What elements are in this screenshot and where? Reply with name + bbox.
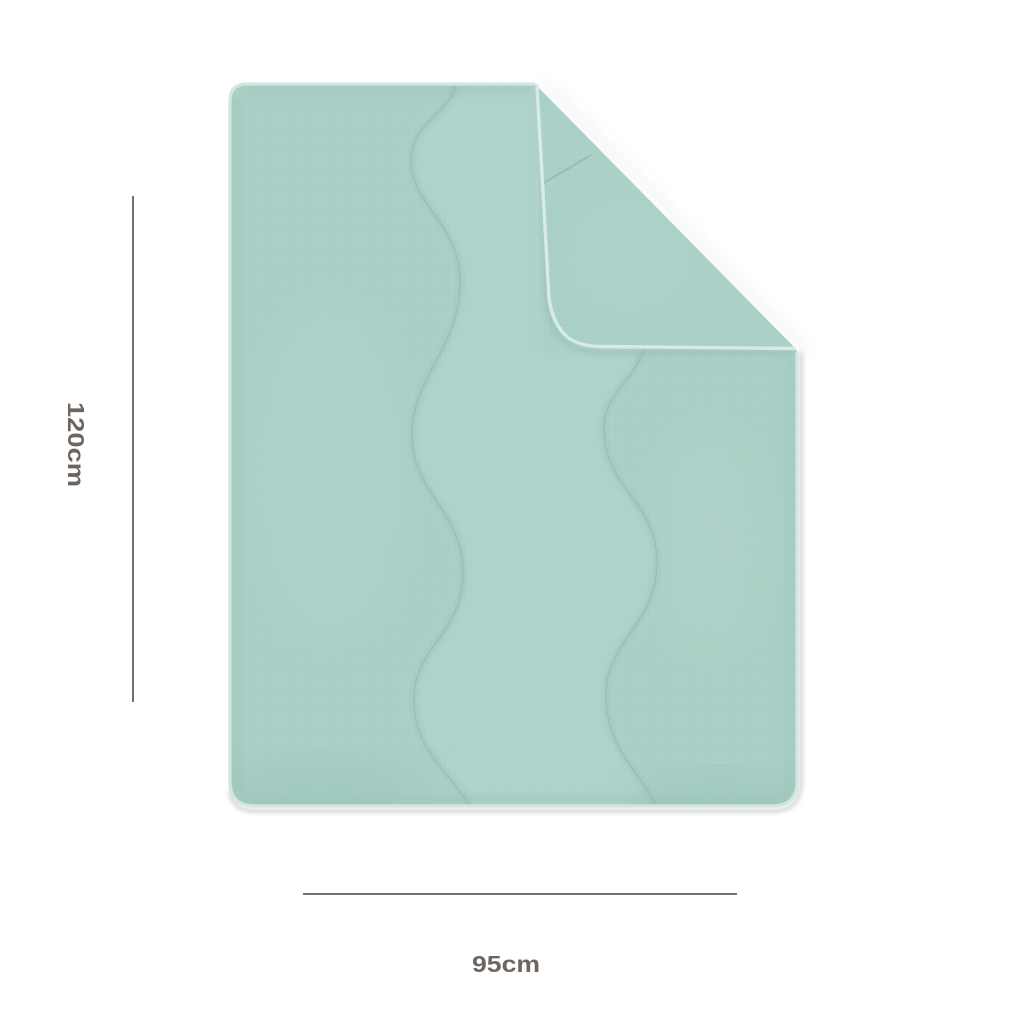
folded corner xyxy=(530,80,800,352)
blanket body xyxy=(210,80,810,822)
quilting seam: right wave shadow xyxy=(604,350,657,806)
flap quilting seam xyxy=(542,155,591,184)
piping: outer edge xyxy=(230,84,797,806)
quilted panel shading xyxy=(565,184,769,349)
flap piping xyxy=(537,86,794,348)
width label: 95cm xyxy=(472,951,540,977)
blanket xyxy=(210,80,810,822)
height label: 120cm xyxy=(63,402,89,487)
blanket drop shadow xyxy=(230,84,806,811)
width dimension line xyxy=(303,893,737,895)
quilting seam: left wave shadow xyxy=(410,100,463,790)
shadow under fold xyxy=(543,237,792,354)
quilting seam: right wave xyxy=(604,350,657,806)
lower corners deepening xyxy=(210,764,430,816)
height dimension line xyxy=(132,196,134,702)
central panel highlight xyxy=(411,84,657,806)
edge shading xyxy=(467,90,523,92)
quilting seam: left wave xyxy=(411,84,470,806)
infographic canvas xyxy=(68,82,805,972)
